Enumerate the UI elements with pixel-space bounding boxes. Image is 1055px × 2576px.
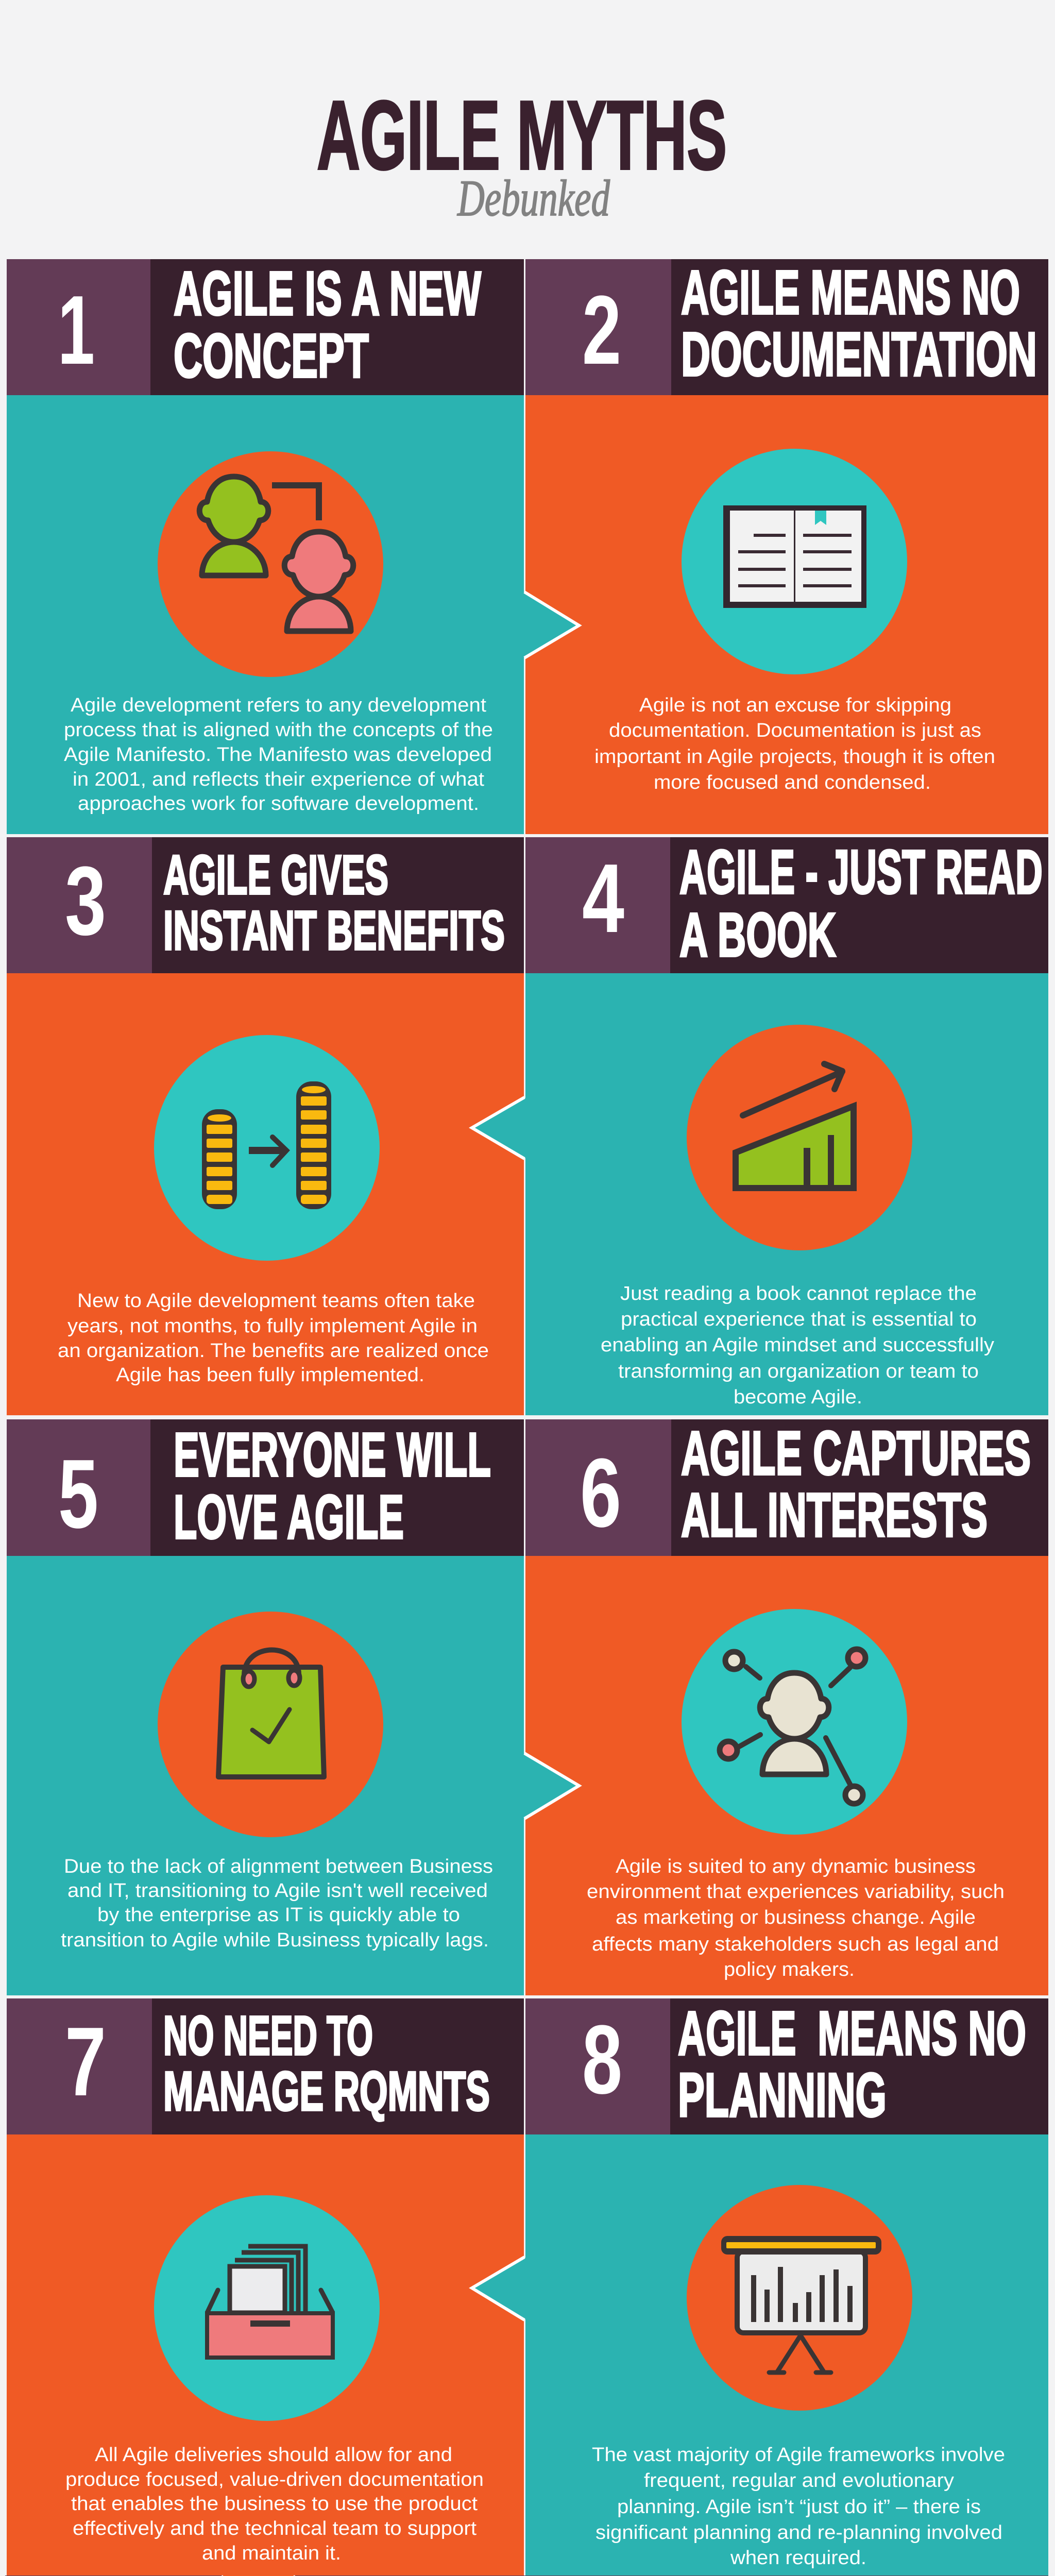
myth 1 header — [7, 258, 524, 395]
arrow: myth 8 to 7 — [472, 2257, 526, 2320]
heading 6 — [681, 1418, 1031, 1550]
text: myth 8: when required. — [730, 2547, 866, 2569]
heading 8: PLANNING — [678, 2060, 887, 2130]
arrow: myth 4 to 3 — [472, 1097, 526, 1159]
text: myth 7: and maintain it. — [202, 2543, 341, 2564]
text: myth 6: affects many stakeholders such as legal and — [592, 1934, 999, 1955]
text: myth 6: environment that experiences variability, such — [587, 1881, 1005, 1903]
text: myth 2 — [594, 694, 995, 793]
text: myth 3: New to Agile development teams often take — [77, 1290, 475, 1312]
icon: connected person — [682, 1609, 907, 1835]
text: myth 5: and IT, transitioning to Agile isn't well received — [67, 1880, 488, 1902]
heading 1 — [174, 258, 482, 391]
heading 5: EVERYONE WILL — [174, 1419, 491, 1489]
text: myth 4: become Agile. — [734, 1386, 862, 1408]
text: myth 3 — [58, 1290, 489, 1386]
text: myth 4: enabling an Agile mindset and successfully — [601, 1334, 994, 1356]
heading 2 — [681, 257, 1037, 389]
text: myth 4: practical experience that is essential to — [621, 1309, 977, 1330]
myth 3 header — [7, 837, 524, 973]
text: myth 7 — [65, 2444, 484, 2564]
myth 7 header — [7, 1998, 524, 2134]
text: myth 7: that enables the business to use the product — [71, 2493, 478, 2515]
heading 3 — [163, 843, 505, 961]
number 7: 7 — [65, 2007, 106, 2116]
title: AGILE MYTHS — [317, 81, 727, 190]
text: myth 5: by the enterprise as IT is quickly able to — [97, 1904, 460, 1926]
text: myth 1 — [64, 694, 493, 815]
text: myth 6: policy makers. — [724, 1959, 855, 1980]
heading 3: INSTANT BENEFITS — [163, 899, 505, 961]
text: myth 1: approaches work for software development. — [78, 793, 479, 815]
panel: myth 2 body — [525, 395, 1048, 834]
myth 5 header — [7, 1419, 524, 1556]
text: myth 3: years, not months, to fully implement Agile in — [67, 1315, 478, 1337]
icon: people — [158, 451, 383, 677]
text: myth 6: Agile is suited to any dynamic business — [616, 1856, 976, 1877]
panel: myth 4 body — [525, 973, 1048, 1415]
text: myth 2: important in Agile projects, though it is often — [594, 746, 995, 768]
text: myth 5 — [61, 1856, 493, 1951]
heading 5: LOVE AGILE — [174, 1482, 404, 1552]
text: myth 8: significant planning and re-planning involved — [595, 2522, 1002, 2544]
myth 6 header — [525, 1418, 1048, 1556]
text: myth 2: documentation. Documentation is just as — [609, 720, 981, 741]
myth 4 header — [525, 837, 1048, 973]
text: myth 6: as marketing or business change. Agile — [616, 1907, 976, 1928]
heading 1: CONCEPT — [174, 320, 369, 391]
icon: coin stacks — [154, 1035, 380, 1261]
heading 7: MANAGE RQMNTS — [163, 2060, 490, 2122]
number 3: 3 — [65, 846, 106, 956]
text: myth 4: transforming an organization or team to — [618, 1361, 979, 1382]
panel: myth 5 body — [7, 1556, 524, 1995]
panel: myth 7 body — [7, 2134, 524, 2575]
icon: growth chart — [687, 1025, 912, 1250]
heading 1: AGILE IS A NEW — [174, 258, 482, 328]
number 2: 2 — [582, 276, 621, 385]
text: myth 2: more focused and condensed. — [654, 772, 931, 793]
arrow: myth 5 to 6 — [523, 1753, 580, 1819]
text: myth 1: Agile development refers to any development — [71, 694, 486, 716]
text: myth 8: frequent, regular and evolutionary — [644, 2470, 954, 2492]
text: myth 1: in 2001, and reflects their experience of what — [73, 769, 484, 790]
icon: book — [682, 449, 907, 674]
panel: myth 1 body — [7, 395, 524, 834]
text: myth 8: The vast majority of Agile frameworks involve — [592, 2444, 1005, 2466]
heading 4 — [679, 837, 1043, 970]
panel: myth 8 body — [525, 2134, 1048, 2575]
number 6: 6 — [580, 1438, 621, 1548]
heading 7: NO NEED TO — [163, 2004, 373, 2066]
icon: shopping bag — [158, 1612, 383, 1837]
icon: file box — [154, 2195, 380, 2421]
text: myth 4: Just reading a book cannot replace the — [620, 1283, 977, 1304]
heading 5 — [174, 1419, 491, 1552]
text: myth 8: planning. Agile isn’t “just do it” – there is — [617, 2496, 981, 2518]
number 8: 8 — [582, 2005, 622, 2114]
heading 8 — [678, 1998, 1026, 2130]
panel: footer — [5, 2574, 1048, 2576]
text: myth 7: All Agile deliveries should allow for and — [95, 2444, 452, 2466]
text: myth 8 — [592, 2444, 1005, 2569]
arrow: into footer — [222, 2574, 295, 2576]
subtitle: Debunked — [457, 170, 610, 227]
text: myth 2: Agile is not an excuse for skipping — [639, 694, 951, 716]
title block — [317, 81, 727, 227]
number 1: 1 — [58, 276, 95, 385]
text: myth 3: an organization. The benefits are realized once — [58, 1340, 489, 1362]
number 4: 4 — [582, 844, 624, 953]
text: myth 4 — [601, 1283, 994, 1408]
arrow: myth 1 to 2 — [523, 592, 580, 658]
panel: myth 6 body — [525, 1556, 1048, 1995]
text: myth 5: Due to the lack of alignment between Business — [64, 1856, 493, 1877]
heading 3: AGILE GIVES — [163, 843, 388, 906]
text: myth 7: produce focused, value-driven documentation — [65, 2469, 484, 2490]
text: myth 7: effectively and the technical team to support — [73, 2518, 477, 2539]
text: myth 6 — [587, 1856, 1005, 1980]
myth 2 header — [525, 257, 1048, 395]
text: myth 1: process that is aligned with the concepts of the — [64, 719, 493, 741]
myth 8 header — [525, 1998, 1048, 2134]
number 5: 5 — [58, 1439, 98, 1549]
text: myth 1: Agile Manifesto. The Manifesto was developed — [64, 744, 492, 766]
heading 4: A BOOK — [679, 900, 836, 970]
text: myth 5: transition to Agile while Business typically lags. — [61, 1929, 489, 1951]
panel: myth 3 body — [7, 973, 524, 1415]
heading 7 — [163, 2004, 490, 2122]
text: myth 3: Agile has been fully implemented. — [116, 1364, 424, 1386]
icon: presentation board — [687, 2185, 912, 2411]
